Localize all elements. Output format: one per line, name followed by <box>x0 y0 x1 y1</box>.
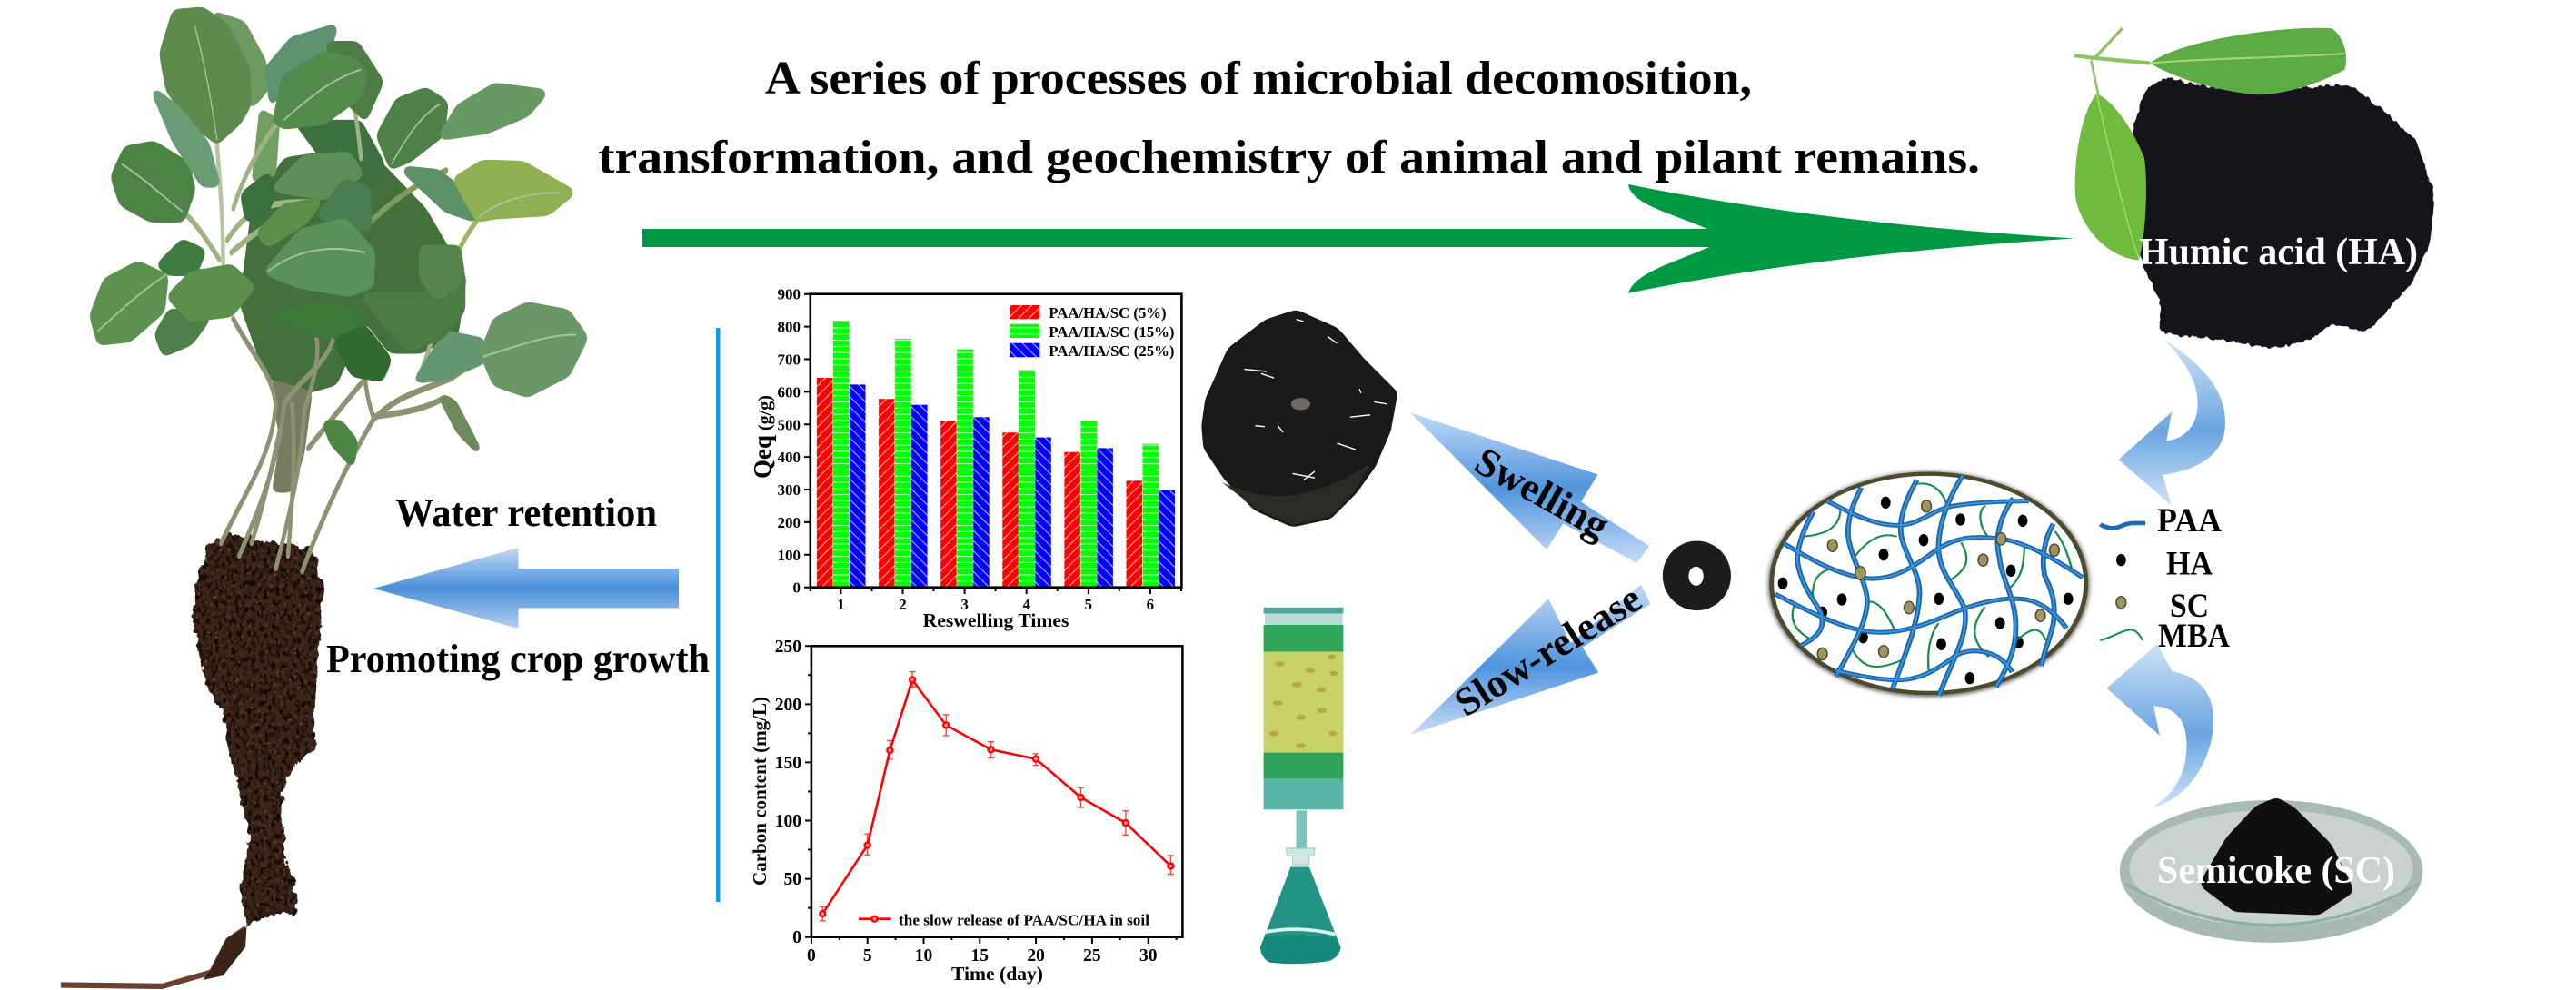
legend: PAA/HA/SC (5%) <box>1049 304 1167 322</box>
bar chart: reswelling <box>749 286 1181 631</box>
legend: the slow release of PAA/SC/HA in soil <box>899 911 1149 928</box>
HA particles <box>1778 497 2074 684</box>
legend <box>1010 304 1174 360</box>
label: semicoke: Semicoke (SC) <box>2157 850 2395 892</box>
x tick labels <box>837 596 1154 613</box>
label: water retention: Water retention <box>395 490 657 535</box>
divider: blue vertical line <box>716 328 720 902</box>
legend: PAA/HA/SC (25%) <box>1049 342 1174 360</box>
title: transformation, and geochemistry of animal and pilant remains. <box>598 132 1980 183</box>
legend: PAA/HA/SC (15%) <box>1049 323 1174 341</box>
y tick labels <box>775 638 801 947</box>
x tick labels: 30 <box>1139 946 1157 965</box>
tick labels: 200 <box>778 514 801 531</box>
arrow: slow-release <box>1411 584 1650 734</box>
error bars <box>820 672 1174 921</box>
y axis title: Qeq (g/g) <box>749 395 776 479</box>
x tick labels: 15 <box>971 946 989 965</box>
x tick labels: 10 <box>915 946 932 965</box>
tick labels <box>778 286 801 597</box>
illustration: filtration column and flask <box>1260 608 1343 964</box>
x tick labels: 4 <box>1022 596 1030 613</box>
x tick labels: 1 <box>837 596 845 613</box>
x tick labels: 0 <box>807 946 816 965</box>
leaves <box>93 12 585 463</box>
photo: humic acid powder with leaves <box>2074 28 2432 344</box>
bars <box>817 321 1175 588</box>
tick labels: 300 <box>778 481 801 499</box>
legend PAA <box>2100 502 2222 540</box>
x tick labels: 25 <box>1083 946 1101 965</box>
legend PAA: PAA <box>2157 502 2222 540</box>
leaf veins <box>97 25 576 357</box>
tick labels: 600 <box>778 383 801 401</box>
y tick labels: 200 <box>775 696 801 715</box>
x tick labels: 2 <box>899 596 907 613</box>
tick labels: 100 <box>778 547 801 564</box>
y tick labels: 50 <box>783 870 801 889</box>
x tick labels: 5 <box>863 946 872 965</box>
tick labels: 700 <box>778 351 801 369</box>
legend SC: SC <box>2170 588 2209 625</box>
MBA crosslinks <box>1793 483 2073 672</box>
dark foliage behind <box>239 107 466 492</box>
SC particles <box>1817 500 2059 660</box>
x axis title: Reswelling Times <box>923 609 1069 631</box>
PAA chains <box>1775 475 2083 696</box>
x tick labels: 3 <box>960 596 969 613</box>
arrow: humic acid into network <box>2119 340 2225 505</box>
photo: plant with root ball <box>61 12 585 986</box>
axes <box>804 294 1181 594</box>
photo: swollen black hydrogel <box>1203 312 1396 525</box>
legend HA: HA <box>2166 546 2213 583</box>
photo: hydrogel disk <box>1663 541 1731 610</box>
arrow: green process arrow <box>642 184 2074 293</box>
stems <box>166 101 482 571</box>
x tick labels <box>807 946 1157 965</box>
y tick labels: 250 <box>775 638 801 657</box>
tick labels: 0 <box>792 579 801 597</box>
line chart: carbon release <box>749 638 1182 985</box>
diagram: polymer network <box>1772 474 2086 696</box>
label: promoting crop growth: Promoting crop growth <box>326 637 710 681</box>
y tick labels: 0 <box>792 928 801 947</box>
photo: semicoke on glass dish <box>2120 800 2422 943</box>
soil root ball <box>61 537 324 986</box>
legend HA <box>2116 546 2213 583</box>
x tick labels: 5 <box>1085 596 1092 613</box>
legend MBA <box>2100 618 2230 655</box>
data markers <box>820 678 1173 916</box>
legend MBA: MBA <box>2158 618 2230 655</box>
title: A series of processes of microbial decomosition, <box>765 53 1752 104</box>
data line <box>822 679 1170 914</box>
y tick labels: 100 <box>775 812 801 831</box>
arrow: swelling <box>1410 412 1649 563</box>
tick labels: 500 <box>778 416 801 433</box>
tick labels: 400 <box>778 449 801 466</box>
y axis title: Carbon content (mg/L) <box>749 697 771 886</box>
arrow: blue arrow to plant <box>373 548 679 629</box>
x axis title: Time (day) <box>951 963 1043 985</box>
label: humic acid: Humic acid (HA) <box>2139 232 2418 273</box>
legend: network components <box>2100 502 2230 655</box>
y tick labels: 150 <box>775 754 801 773</box>
legend SC <box>2116 588 2209 625</box>
tick labels: 900 <box>778 286 801 303</box>
tick labels: 800 <box>778 319 801 336</box>
x tick labels: 20 <box>1027 946 1045 965</box>
axes <box>805 646 1182 944</box>
x tick labels: 6 <box>1147 596 1154 613</box>
label: slow-release: Slow-release <box>1447 576 1649 725</box>
arrow: semicoke into network <box>2107 644 2213 807</box>
label: swelling: Swelling <box>1467 439 1616 548</box>
title <box>598 53 1980 183</box>
